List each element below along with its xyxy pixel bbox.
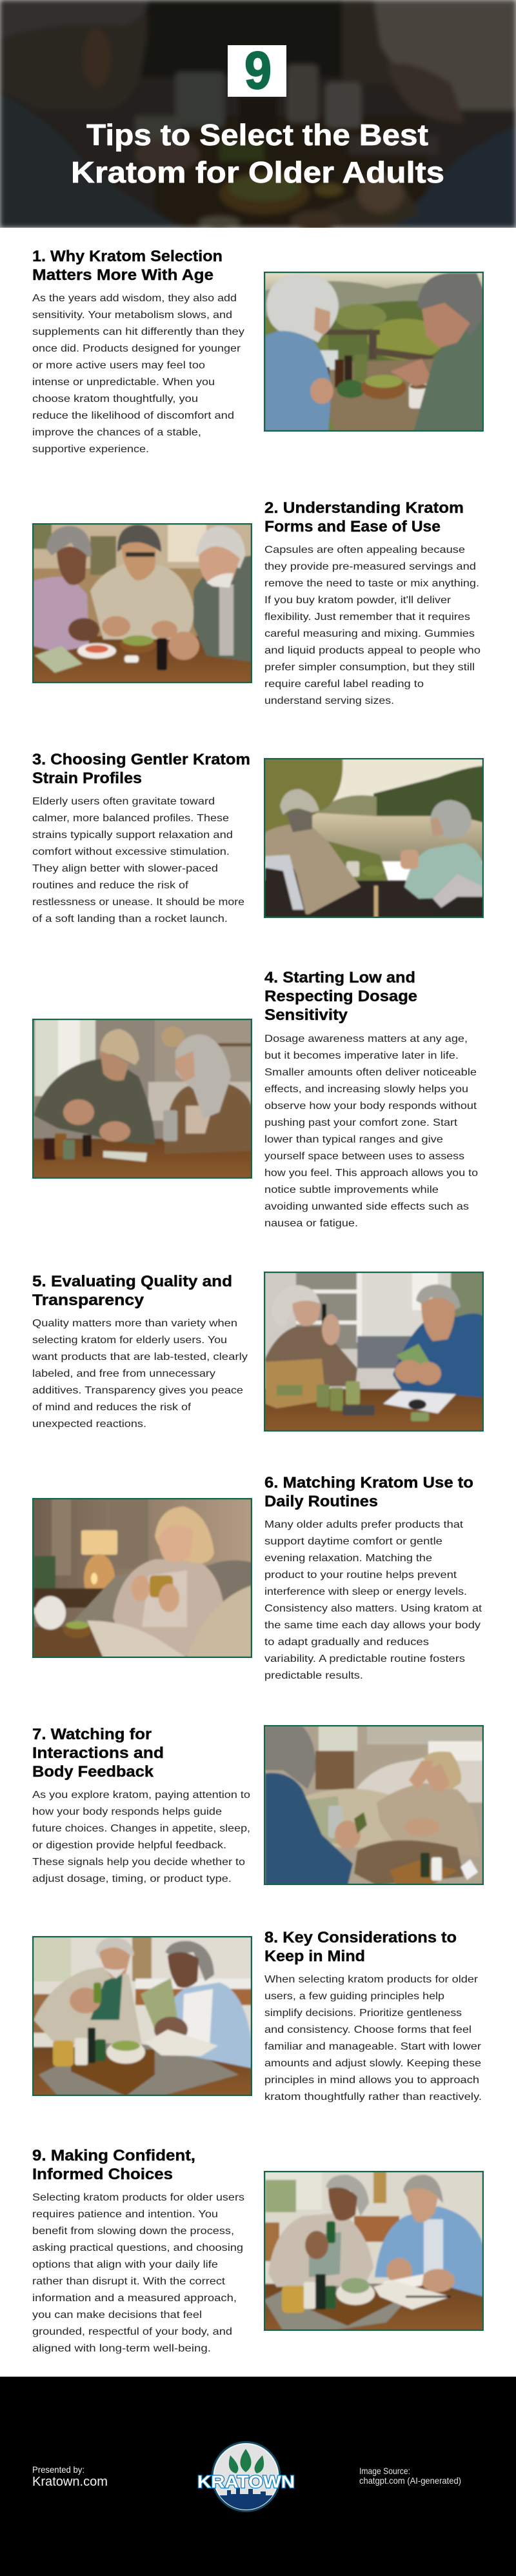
footer [0, 2377, 516, 2576]
body text 6: predictable results. [264, 1670, 363, 1681]
heading 6 [264, 1474, 473, 1510]
body text 2: prefer simpler consumption, but they still [264, 662, 475, 673]
body text 6 [264, 1519, 482, 1681]
heading 3: Strain Profiles [32, 770, 142, 787]
man [413, 273, 484, 432]
tray with bottles, bowl, notebook [282, 2274, 451, 2326]
bowl [120, 635, 156, 654]
pillow and blanket [87, 1585, 252, 1658]
heading 5 [32, 1273, 232, 1309]
body text 6: product to your routine helps prevent [264, 1570, 457, 1581]
body text 9: asking practical questions, and choosing [32, 2242, 243, 2253]
woman [163, 1034, 252, 1154]
body text 7 [32, 1790, 250, 1884]
body text 8: familiar and manageable. Start with lower [264, 2041, 481, 2052]
body text 3: restlessness or unease. It should be more [32, 897, 244, 908]
heading 9: Informed Choices [32, 2166, 173, 2183]
section 2 [32, 499, 481, 706]
number badge [228, 41, 286, 100]
heading 6: Daily Routines [264, 1493, 378, 1510]
heading 2: Forms and Ease of Use [264, 518, 441, 535]
body text 9: you can make decisions that feel [32, 2310, 202, 2321]
heading 5: 5. Evaluating Quality and [32, 1273, 232, 1290]
body text 1: choose kratom thoughtfully, you [32, 394, 198, 404]
kraft bags and jars [265, 1359, 360, 1411]
man [34, 1937, 142, 2047]
body text 6: to adapt gradually and reduces [264, 1637, 429, 1648]
photo: couple measuring dose [32, 1019, 252, 1179]
teapot and bowl [35, 1596, 92, 1638]
body text 4: observe how your body responds without [264, 1101, 477, 1112]
body text 1 [32, 293, 244, 455]
sofa [304, 1787, 392, 1848]
heading 4 [264, 969, 417, 1024]
presented by: Kratown.com [32, 2475, 108, 2489]
woman [268, 2175, 373, 2287]
tray with bottles, bowl, notebook [53, 2028, 218, 2096]
image source: chatgpt.com (AI-generated) [359, 2475, 461, 2486]
body text 4: effects, and increasing slowly helps you [264, 1084, 468, 1095]
body text 5: unexpected reactions. [32, 1419, 146, 1430]
woman [265, 274, 339, 432]
body text 3: Elderly users often gravitate toward [32, 796, 215, 807]
heading 1: 1. Why Kratom Selection [32, 248, 223, 265]
woman [401, 800, 484, 918]
body text 2: flexibility. Just remember that it requires [264, 612, 470, 623]
body text 3: They align better with slower-paced [32, 863, 218, 874]
body text 4: nausea or fatigue. [264, 1218, 358, 1229]
photo: couple taking notes [264, 2171, 484, 2331]
body text 1: once did. Products designed for younger [32, 343, 241, 354]
heading 8 [264, 1929, 457, 1965]
heading 3: 3. Choosing Gentler Kratom [32, 751, 250, 768]
man right [168, 526, 252, 662]
body text 5: selecting kratom for elderly users. You [32, 1335, 227, 1346]
body text 4: yourself space between uses to assess [264, 1151, 464, 1162]
bottles and pill box [44, 1133, 147, 1162]
man [393, 1284, 484, 1397]
heading 9: 9. Making Confident, [32, 2147, 195, 2164]
body text 1: supportive experience. [32, 444, 149, 455]
title: Tips to Select the Best [86, 118, 428, 152]
man [375, 2175, 484, 2297]
bag and plate [35, 643, 116, 673]
body text 6: the same time each day allows your body [264, 1620, 481, 1631]
body text 1: improve the chances of a stable, [32, 427, 201, 438]
heading 7: Body Feedback [32, 1763, 154, 1781]
photo: three adults at table [32, 523, 252, 683]
body text 3: calmer, more balanced profiles. These [32, 813, 229, 824]
heading 6: 6. Matching Kratom Use to [264, 1474, 473, 1492]
body text 7: As you explore kratom, paying attention to [32, 1790, 250, 1801]
body text 5 [32, 1318, 248, 1430]
body text 2: Capsules are often appealing because [264, 544, 465, 555]
body text 2: remove the need to taste or mix anything. [264, 578, 479, 589]
heading 8: Keep in Mind [264, 1948, 365, 1965]
body text 5: labeled, and free from unnecessary [32, 1368, 215, 1379]
body text 2: understand serving sizes. [264, 695, 394, 706]
body text 8: simplify decisions. Prioritize gentleness [264, 2008, 462, 2019]
body text 6: variability. A predictable routine fosters [264, 1653, 465, 1664]
bowl of powder [361, 375, 406, 399]
heading 7: Interactions and [32, 1744, 164, 1762]
photo: man helping woman with headache [264, 1725, 484, 1885]
body text 3 [32, 796, 244, 924]
heading 7 [32, 1726, 164, 1781]
body text 7: or digestion provide helpful feedback. [32, 1840, 226, 1851]
body text 8: users, a few guiding principles help [264, 1991, 444, 2002]
man [265, 789, 361, 914]
body text 9: aligned with long-term well-being. [32, 2343, 211, 2354]
photo: couple by misty lake [264, 758, 484, 918]
body text 5: of mind and reduces the risk of [32, 1402, 192, 1413]
leaves [229, 2449, 264, 2473]
Kratown logo [197, 2441, 295, 2515]
man [34, 1029, 155, 1144]
body text 2: and liquid products appeal to people who [264, 645, 481, 656]
heading 4: 4. Starting Low and [264, 969, 415, 986]
woman left [32, 526, 99, 652]
body text 4: avoiding unwanted side effects such as [264, 1201, 469, 1212]
body text 8: When selecting kratom products for older [264, 1974, 478, 1985]
title: Kratom for Older Adults [71, 155, 444, 189]
body text 9: information and a measured approach, [32, 2293, 237, 2304]
heading 4: Sensitivity [264, 1006, 348, 1024]
Kratown logo: KRATOWN [197, 2472, 295, 2491]
body text 5: Quality matters more than variety when [32, 1318, 237, 1329]
body text 6: support daytime comfort or gentle [264, 1536, 442, 1547]
body text 7: These signals help you decide whether to [32, 1857, 245, 1868]
header banner [0, 0, 516, 231]
heading 7: 7. Watching for [32, 1726, 152, 1743]
section 6 [32, 1474, 482, 1681]
body text 9: grounded, respectful of your body, and [32, 2326, 232, 2337]
body text 5: want products that are lab-tested, clearly [32, 1352, 248, 1363]
woman [265, 1285, 357, 1386]
body text 9: rather than disrupt it. With the correct [32, 2276, 226, 2287]
body text 8: kratom thoughtfully rather than reactively. [264, 2092, 482, 2102]
header background photo [0, 0, 516, 231]
image source: Image Source: [359, 2466, 410, 2476]
body text 2: careful measuring and mixing. Gummies [264, 628, 475, 639]
body text 3: strains typically support relaxation and [32, 830, 233, 841]
body text 4: pushing past your comfort zone. Start [264, 1117, 458, 1128]
body text 8: and consistency. Choose forms that feel [264, 2024, 471, 2035]
body text 9: requires patience and intention. You [32, 2209, 218, 2220]
body text 8: principles in mind allows you to approach [264, 2075, 479, 2086]
heading 1 [32, 248, 223, 284]
body text 9: benefit from slowing down the process, [32, 2226, 234, 2237]
body text 6: Many older adults prefer products that [264, 1519, 464, 1530]
body text 3: of a soft landing than a rocket launch. [32, 914, 228, 924]
body text 4: Smaller amounts often deliver noticeable [264, 1067, 477, 1078]
section 5 [32, 1272, 484, 1432]
heading 9 [32, 2147, 195, 2183]
woman [113, 1506, 224, 1656]
body text 6: Consistency also matters. Using kratom at [264, 1603, 482, 1614]
body text 7: adjust dosage, timing, or product type. [32, 1873, 232, 1884]
heading 3 [32, 751, 250, 787]
body text 1: supplements can hit differently than they [32, 326, 244, 337]
heading 1: Matters More With Age [32, 266, 213, 284]
section 7 [32, 1725, 484, 1885]
body text 9: options that align with your daily life [32, 2259, 218, 2270]
image source [359, 2466, 461, 2486]
section 4 [32, 969, 478, 1229]
man centre [90, 524, 194, 639]
scale and clipboard [342, 1391, 456, 1421]
heading 8: 8. Key Considerations to [264, 1929, 457, 1946]
heading 2: 2. Understanding Kratom [264, 499, 464, 517]
section 1 [32, 248, 484, 455]
woman [141, 1941, 252, 2068]
body text 9: Selecting kratom products for older users [32, 2192, 244, 2203]
body text 8 [264, 1974, 482, 2102]
heading 5: Transparency [32, 1292, 144, 1309]
section 3 [32, 751, 484, 924]
mug [409, 384, 430, 408]
woman [354, 1752, 480, 1885]
body text 4: but it becomes imperative later in life. [264, 1050, 459, 1061]
body text 7: how your body responds helps guide [32, 1806, 222, 1817]
photo: couple reviewing dropper and bag [32, 1936, 252, 2096]
photo: woman with tea on sofa [32, 1498, 252, 1658]
section 8 [32, 1929, 482, 2102]
body text 9 [32, 2192, 244, 2354]
body text 3: routines and reduce the risk of [32, 880, 189, 891]
body text 3: comfort without excessive stimulation. [32, 846, 230, 857]
body text 8: amounts and adjust slowly. Keeping these [264, 2058, 481, 2069]
presented by: Presented by: [32, 2464, 84, 2475]
body text 5: additives. Transparency gives you peace [32, 1385, 243, 1396]
body text 2: If you buy kratom powder, it'll deliver [264, 595, 451, 606]
body text 4: notice subtle improvements while [264, 1184, 439, 1195]
body text 4: lower than typical ranges and give [264, 1134, 443, 1145]
tray with bottles [390, 1853, 478, 1885]
body text 2 [264, 544, 481, 706]
man [265, 1726, 367, 1885]
photo: couple inspecting products [264, 1272, 484, 1432]
body text 2: they provide pre-measured servings and [264, 561, 476, 572]
body text 1: intense or unpredictable. When you [32, 377, 215, 388]
body text 4: Dosage awareness matters at any age, [264, 1033, 468, 1044]
presented by [32, 2464, 108, 2489]
heading 2 [264, 499, 464, 535]
title [71, 118, 444, 189]
section 9 [32, 2147, 484, 2354]
body text 1: reduce the likelihood of discomfort and [32, 410, 234, 421]
body text 2: require careful label reading to [264, 679, 424, 690]
number badge: 9 [244, 41, 272, 100]
body text 6: interference with sleep or energy levels. [264, 1586, 467, 1597]
heading 4: Respecting Dosage [264, 988, 417, 1005]
body text 1: As the years add wisdom, they also add [32, 293, 237, 304]
body text 4 [264, 1033, 478, 1229]
body text 1: sensitivity. Your metabolism slows, and [32, 310, 232, 321]
body text 7: future choices. Changes in appetite, sleep, [32, 1823, 250, 1834]
photo: couple at mountain table [264, 272, 484, 432]
body text 6: evening relaxation. Matching the [264, 1553, 432, 1564]
body text 1: or more active users may feel too [32, 360, 205, 371]
body text 4: how you feel. This approach allows you to [264, 1168, 478, 1179]
